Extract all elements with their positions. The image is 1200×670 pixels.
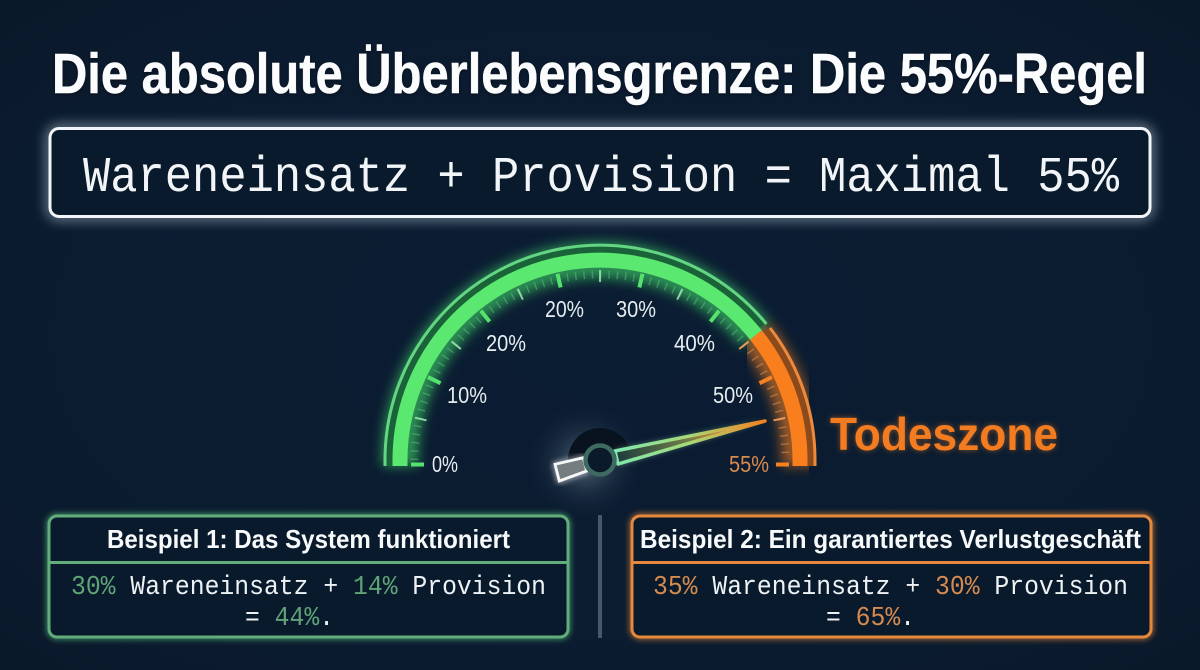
card 2 divider — [632, 561, 1151, 564]
card 1 divider — [49, 561, 568, 564]
orange main band — [756, 335, 800, 466]
scale labels: 55% — [729, 451, 769, 477]
medium green ticks — [415, 270, 682, 420]
green outer thin arc — [385, 245, 766, 466]
scale labels: 40% — [674, 330, 715, 356]
label: Todeszone: Todeszone — [830, 408, 1058, 460]
speedometer gauge — [385, 245, 815, 524]
card 2 equation line 1: 35% Wareneinsatz + 30% Provision — [653, 573, 1128, 603]
glow behind orange arc — [756, 335, 800, 466]
needle — [615, 421, 765, 465]
card: example 1 — [49, 516, 568, 637]
scale labels: 30% — [616, 296, 656, 322]
hub glow — [523, 400, 647, 524]
hub — [586, 446, 614, 474]
scale labels: 20% — [486, 330, 526, 356]
formula box — [50, 128, 1150, 216]
scale labels: 0% — [432, 451, 458, 477]
label: Todeszone: Todeszone — [830, 408, 1058, 460]
green main band — [400, 260, 756, 466]
card 1 heading: Beispiel 1: Das System funktioniert — [107, 524, 510, 554]
vertical separator — [598, 515, 602, 638]
orange outer thin arc — [770, 328, 815, 466]
card 1 equation line 1: 30% Wareneinsatz + 14% Provision — [71, 573, 546, 603]
needle tail — [555, 458, 587, 481]
hub shadow — [568, 428, 632, 460]
glow behind green arc — [400, 260, 756, 466]
card 2 equation line 2: = 65%. — [826, 604, 915, 634]
orange dark track — [765, 331, 810, 466]
card: example 2 — [632, 516, 1151, 637]
medium orange ticks — [739, 342, 785, 420]
formula text: Wareneinsatz + Provision = Maximal 55% — [83, 150, 1120, 207]
scale labels: 10% — [447, 382, 487, 408]
scale labels: 20% — [545, 296, 584, 322]
card 1 equation line 2: = 44%. — [245, 604, 334, 634]
scale labels — [432, 296, 769, 477]
major orange ticks — [760, 377, 789, 464]
scale labels: 50% — [713, 382, 753, 408]
card 2 heading: Beispiel 2: Ein garantiertes Verlustgeschäft — [640, 524, 1141, 554]
major green ticks — [411, 274, 719, 464]
green dark track — [390, 250, 762, 466]
green minor ticks — [414, 274, 745, 460]
orange minor ticks — [745, 344, 786, 460]
